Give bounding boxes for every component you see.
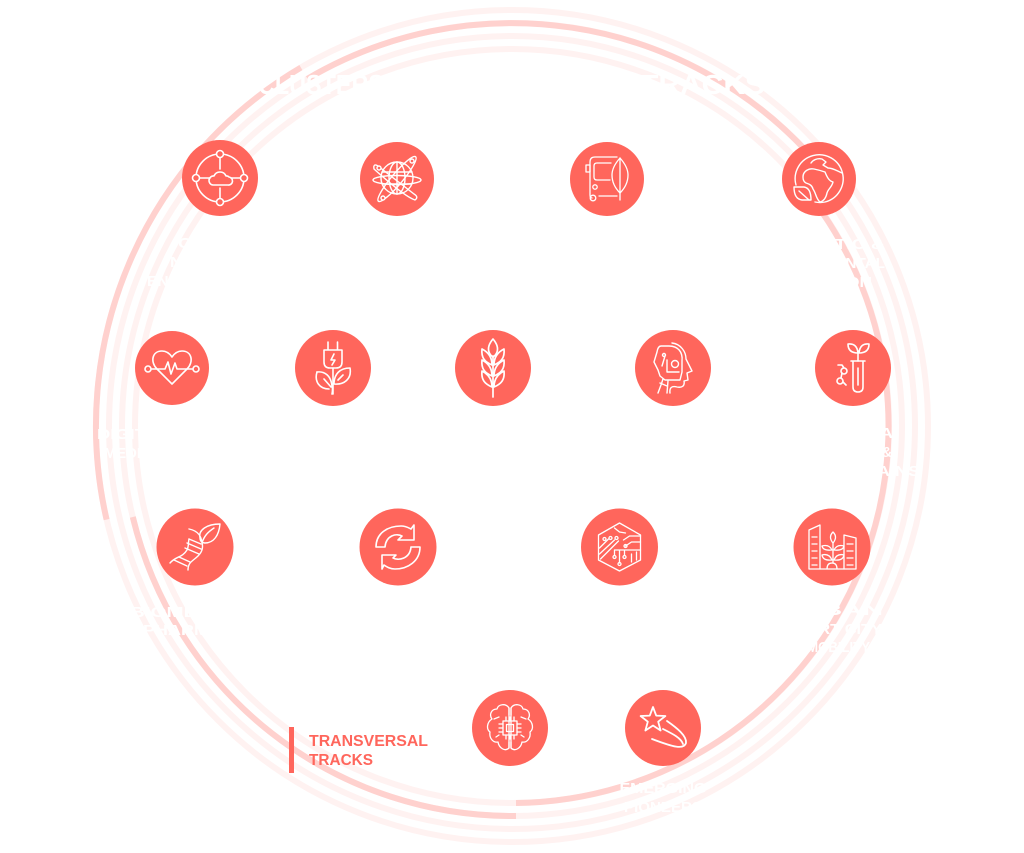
label: smart cities — [781, 602, 883, 656]
label: value chains: BIOTECH & — [814, 444, 892, 461]
label: energetic and environmental transition: ENERGETIC & — [753, 236, 885, 253]
concentric rings — [96, 10, 928, 842]
icon: AI head — [635, 330, 711, 406]
label: smart cities: SMART CITY — [782, 621, 882, 638]
label: upper left: CLOUD & — [178, 235, 262, 252]
transversal tracks legend — [289, 727, 428, 773]
icon: green city — [794, 508, 870, 586]
icon: wheat — [455, 330, 531, 406]
heading: left column: CLUSTERS — [258, 69, 384, 100]
transversal tracks legend: TRACKS — [309, 752, 373, 769]
label: upper left — [147, 235, 293, 290]
label: digital health: MEDICAL DEVICES — [104, 445, 240, 462]
label: value chains: VALUE CHAINS — [786, 463, 920, 480]
label: value chains: BIODATA — [813, 425, 893, 442]
transversal tracks legend: TRANSVERSAL — [309, 733, 428, 750]
label: energetic and environmental transition: TRANSITION — [766, 274, 872, 291]
label: value chains — [786, 425, 920, 480]
label: digital health — [97, 426, 247, 462]
label: emerging pioneers: EMERGING — [620, 780, 706, 797]
icon: heart with pulse — [135, 331, 209, 405]
icon: globe with orbits — [360, 142, 434, 216]
label: energetic and environmental transition: ENVIRONMENTAL — [753, 255, 885, 272]
label: medical and pharma: BIOMEDICAL — [130, 604, 260, 621]
label: upper left: NETWORKS — [170, 254, 270, 271]
label: medical and pharma: PHARMACY — [143, 622, 247, 639]
icon: bus and leaf — [570, 142, 644, 216]
label: energetic and environmental transition — [753, 236, 885, 291]
label: emerging pioneers: PIONEERS — [624, 799, 702, 816]
icon: cloud network — [182, 140, 258, 216]
icon: shooting star — [625, 690, 701, 766]
label: medical and pharma — [130, 604, 260, 639]
icon: plug with leaves — [295, 330, 371, 406]
label: upper left: ENGINEERING FOR — [147, 273, 293, 290]
label: smart cities: & MOBILITY — [794, 639, 870, 656]
icon: earth and leaf — [782, 142, 856, 216]
label: digital health: DIGITAL HEALTH — [97, 426, 247, 443]
icon: circuit hexagon — [581, 508, 658, 586]
label: emerging pioneers — [620, 780, 706, 816]
icon: brain chip — [472, 690, 548, 766]
heading: right column: TRACKS — [640, 69, 765, 100]
icon: DNA with leaf — [156, 508, 234, 586]
label: smart cities: URBAN — [781, 602, 883, 619]
icon: test tube plant — [815, 330, 891, 406]
icon: recycle arrows — [360, 508, 436, 586]
